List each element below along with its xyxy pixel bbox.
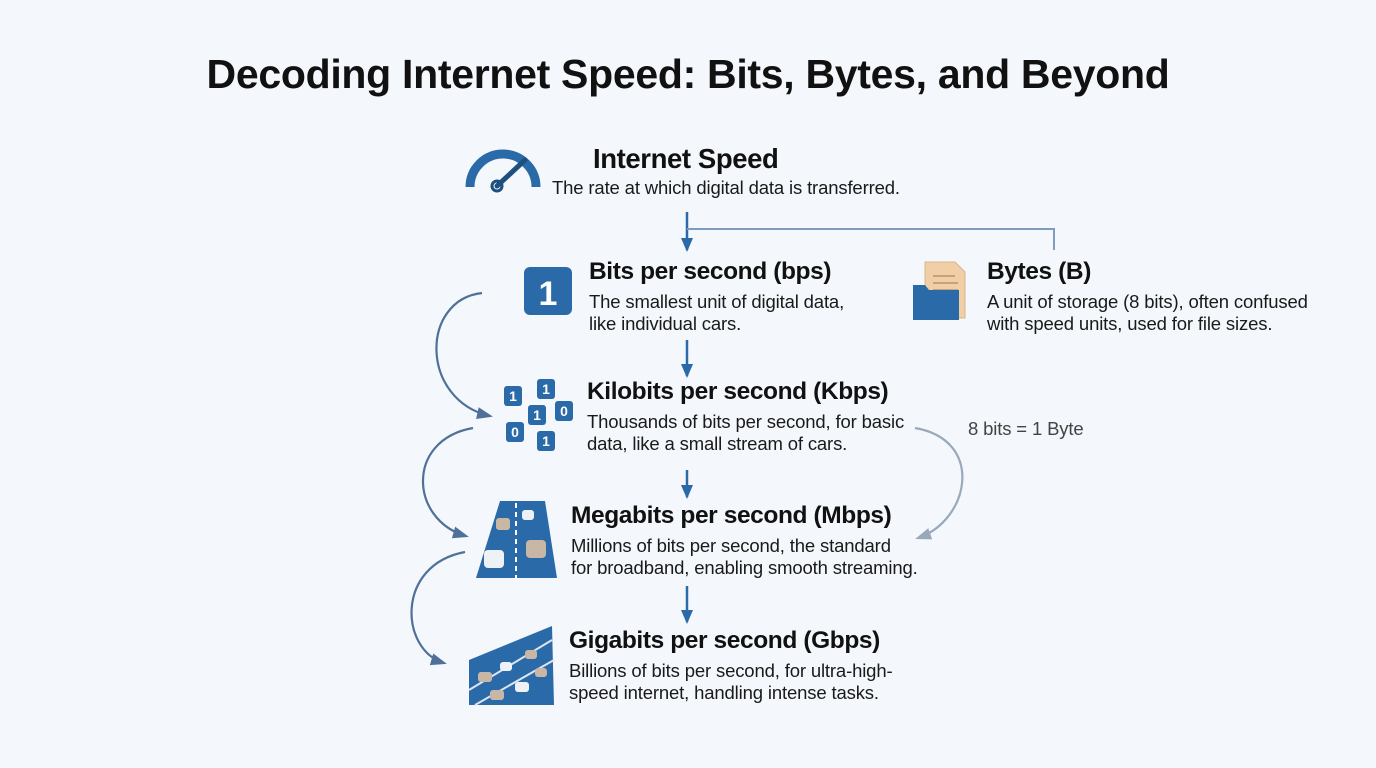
icon: binary blocks: 1 xyxy=(509,388,517,404)
block: bytes: with speed units, used for file sizes. xyxy=(987,313,1272,334)
curved arrows left xyxy=(412,293,490,663)
block: bps xyxy=(589,258,844,334)
block: internet speed xyxy=(552,143,900,198)
block: gbps: Billions of bits per second, for ultra-high- xyxy=(569,660,892,681)
block: bytes xyxy=(987,258,1308,334)
icon: bit 1 xyxy=(524,267,572,315)
block: gbps: speed internet, handling intense tasks. xyxy=(569,682,879,703)
block: bps: Bits per second (bps) xyxy=(589,258,831,285)
block: mbps: Megabits per second (Mbps) xyxy=(571,502,891,529)
block: internet speed: The rate at which digital data is transferred. xyxy=(552,177,900,198)
arrow: bps to kbps xyxy=(686,340,688,376)
block: gbps xyxy=(569,627,892,703)
block: bps: The smallest unit of digital data, xyxy=(589,291,844,312)
block: mbps xyxy=(571,502,918,578)
title: Decoding Internet Speed: Bits, Bytes, and Beyond xyxy=(207,51,1169,97)
block: bps: like individual cars. xyxy=(589,313,741,334)
icon: binary blocks: 1 xyxy=(542,381,550,397)
arrow: mbps to gbps xyxy=(686,586,688,622)
arrow: kbps to mbps xyxy=(686,470,688,497)
icon: road xyxy=(476,501,557,578)
block: kbps xyxy=(587,378,904,454)
block: kbps: Thousands of bits per second, for basic xyxy=(587,411,904,432)
icon: binary blocks: 1 xyxy=(542,433,550,449)
block: kbps: data, like a small stream of cars. xyxy=(587,433,847,454)
icon: bit 1: 1 xyxy=(539,275,557,313)
label: 8 bits = 1 byte: 8 bits = 1 Byte xyxy=(968,418,1084,439)
block: internet speed: Internet Speed xyxy=(593,143,778,174)
block: bytes: Bytes (B) xyxy=(987,258,1091,285)
icon: binary blocks: 0 xyxy=(511,424,519,440)
icon: binary blocks xyxy=(504,379,573,451)
block: mbps: Millions of bits per second, the standard xyxy=(571,535,891,556)
icon: binary blocks: 1 xyxy=(533,407,541,423)
block: gbps: Gigabits per second (Gbps) xyxy=(569,627,880,654)
block: mbps: for broadband, enabling smooth streaming. xyxy=(571,557,918,578)
icon: highway xyxy=(469,626,554,705)
icon: gauge xyxy=(470,154,536,191)
icon: binary blocks: 0 xyxy=(560,403,568,419)
block: kbps: Kilobits per second (Kbps) xyxy=(587,378,888,405)
icon: folder with document xyxy=(913,262,965,320)
curved arrow right gray xyxy=(915,428,962,538)
block: bytes: A unit of storage (8 bits), often confused xyxy=(987,291,1308,312)
arrow: speed to bps xyxy=(687,212,1054,250)
